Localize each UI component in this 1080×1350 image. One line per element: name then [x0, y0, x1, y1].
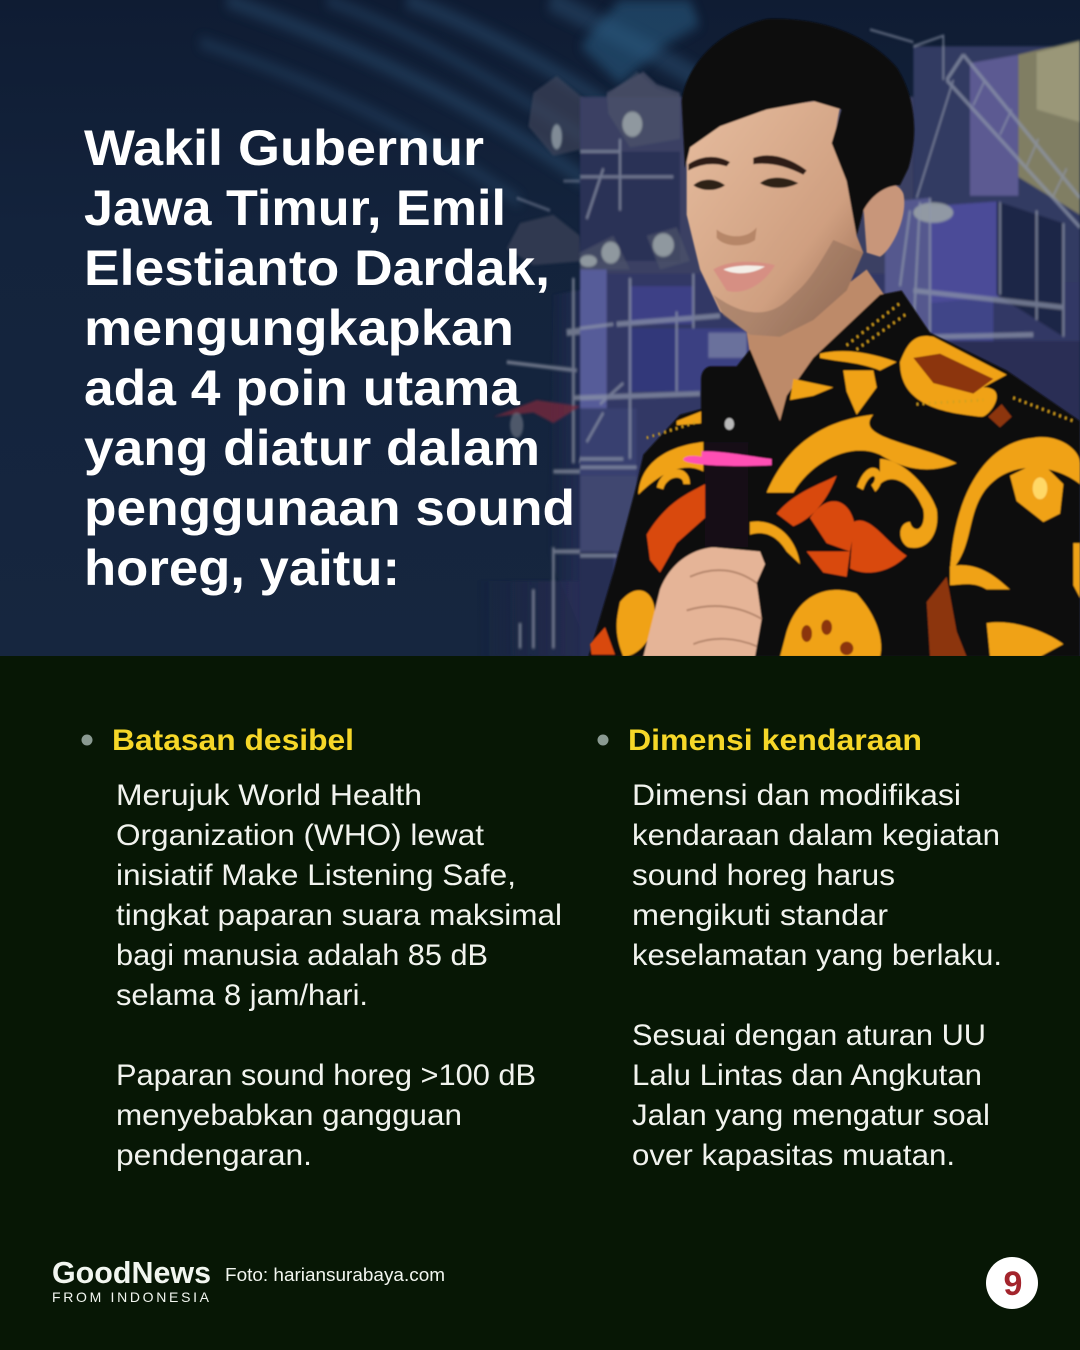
- page number badge: [986, 1257, 1038, 1309]
- stage lights: [507, 72, 700, 269]
- title: horeg, yaitu:: [84, 540, 400, 596]
- panel: dark content background: [0, 656, 1080, 1350]
- microphone: [683, 366, 772, 547]
- title: [84, 120, 575, 596]
- panel: dimensi kendaraan: [598, 724, 1002, 1172]
- heading: dimensi kendaraan: Dimensi kendaraan: [628, 724, 922, 757]
- title: Elestianto Dardak,: [84, 240, 550, 296]
- hair: [682, 19, 914, 236]
- nose: [717, 227, 757, 245]
- text block: dimensi kendaraan: mengikuti standar: [632, 899, 888, 932]
- text block: dimensi kendaraan: Sesuai dengan aturan UU: [632, 1019, 986, 1052]
- icon: bullet: [82, 734, 92, 746]
- text block: batasan desibel: selama 8 jam/hari.: [116, 979, 368, 1012]
- logo: GoodNews from Indonesia: FROM INDONESIA: [52, 1289, 210, 1305]
- heading: batasan desibel: Batasan desibel: [112, 724, 354, 757]
- stage background right: [580, 0, 1080, 657]
- logo: GoodNews from Indonesia: GoodNews: [52, 1255, 211, 1290]
- text block: dimensi kendaraan: Dimensi dan modifikasi: [632, 779, 961, 812]
- photo: man speaking into microphone: [588, 19, 1080, 657]
- text block: batasan desibel: pendengaran.: [116, 1139, 312, 1172]
- text block: dimensi kendaraan: Jalan yang mengatur soal: [632, 1099, 990, 1132]
- text block: batasan desibel: menyebabkan gangguan: [116, 1099, 462, 1132]
- eyes and brows: [688, 155, 807, 190]
- text block: dimensi kendaraan: kendaraan dalam kegiatan: [632, 819, 1000, 852]
- beard shadow: [713, 240, 863, 337]
- mouth: [713, 262, 775, 292]
- ear: [863, 185, 904, 257]
- photo credit: Foto: hariansurabaya.com: [225, 1265, 445, 1285]
- batik shirt: [588, 290, 1080, 657]
- panel: batasan desibel: [82, 724, 562, 1172]
- text block: batasan desibel: inisiatif Make Listening Safe,: [116, 859, 516, 892]
- text block: batasan desibel: tingkat paparan suara maksimal: [116, 899, 562, 932]
- icon: bullet: [598, 734, 608, 746]
- text block: dimensi kendaraan: [632, 779, 1002, 1172]
- stage background left: [200, 0, 700, 657]
- text block: batasan desibel: Merujuk World Health: [116, 779, 422, 812]
- text block: dimensi kendaraan: sound horeg harus: [632, 859, 895, 892]
- title: ada 4 poin utama: [84, 360, 521, 416]
- neck: [747, 269, 890, 429]
- logo: GoodNews from Indonesia: [52, 1255, 211, 1305]
- hand: [643, 547, 765, 657]
- text block: dimensi kendaraan: Lalu Lintas dan Angkutan: [632, 1059, 982, 1092]
- text block: dimensi kendaraan: keselamatan yang berlaku.: [632, 939, 1002, 972]
- panel: photo header: [0, 0, 1080, 657]
- text block: dimensi kendaraan: over kapasitas muatan.: [632, 1139, 955, 1172]
- text block: batasan desibel: bagi manusia adalah 85 dB: [116, 939, 488, 972]
- text block: batasan desibel: Organization (WHO) lewat: [116, 819, 485, 852]
- text block: batasan desibel: Paparan sound horeg >100 dB: [116, 1059, 536, 1092]
- title: Wakil Gubernur: [84, 120, 484, 176]
- title: mengungkapkan: [84, 300, 514, 356]
- title: penggunaan sound: [84, 480, 575, 536]
- face: [687, 101, 863, 337]
- text block: batasan desibel: [116, 779, 562, 1172]
- page number badge: 9: [1004, 1265, 1022, 1303]
- title: Jawa Timur, Emil: [84, 180, 506, 236]
- title: yang diatur dalam: [84, 420, 540, 476]
